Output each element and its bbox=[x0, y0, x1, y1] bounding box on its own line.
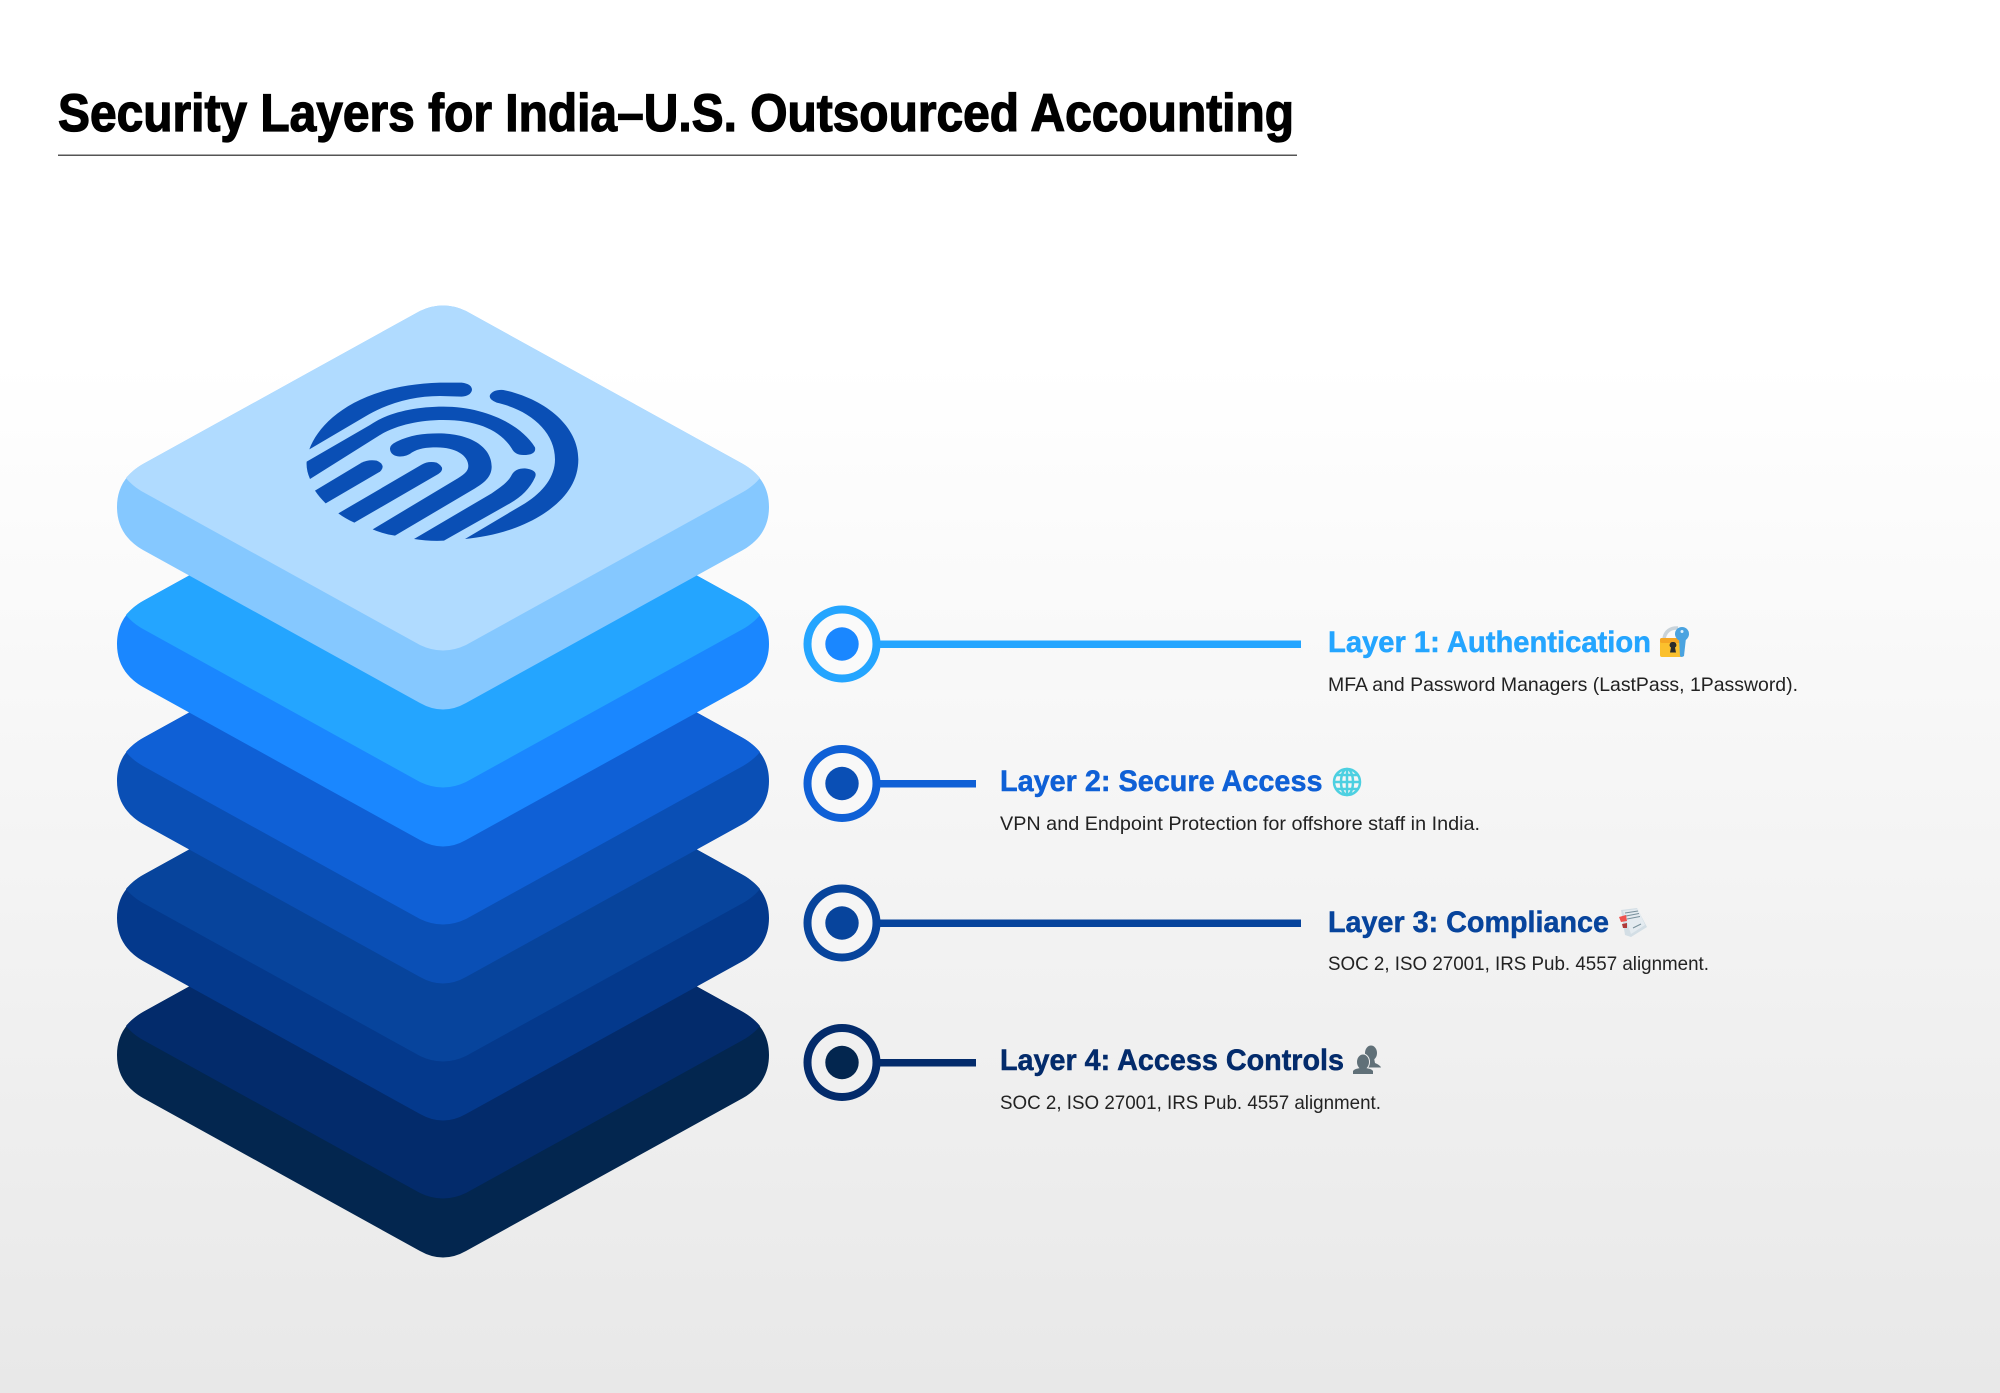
connector line: layer 3 bbox=[878, 920, 1301, 927]
stack layer: access controls bbox=[117, 854, 769, 1258]
callout: layer 4 access controls bbox=[808, 1028, 1381, 1114]
title: Security Layers for India–U.S. Outsourced Accounting bbox=[58, 84, 1294, 143]
marker: layer 1 bbox=[808, 610, 876, 678]
connector line: layer 1 bbox=[878, 640, 1301, 648]
description: layer 3: SOC 2, ISO 27001, IRS Pub. 4557 alignment. bbox=[1328, 953, 1709, 975]
icon: globe bbox=[1334, 769, 1360, 795]
heading: layer 1: Layer 1: Authentication bbox=[1328, 626, 1651, 659]
stack layer: compliance bbox=[117, 716, 769, 1120]
heading: layer 2: Layer 2: Secure Access bbox=[1000, 765, 1322, 798]
stack layer: authentication bbox=[117, 442, 769, 846]
heading: layer 3: Layer 3: Compliance bbox=[1328, 906, 1609, 939]
marker: layer 3 bbox=[808, 888, 876, 958]
marker: layer 4 bbox=[808, 1028, 876, 1097]
stack layer: secure access bbox=[117, 580, 769, 984]
connector line: layer 2 bbox=[878, 780, 976, 788]
marker: layer 2 bbox=[808, 749, 876, 818]
connector line: layer 4 bbox=[878, 1059, 976, 1066]
description: layer 2: VPN and Endpoint Protection for offshore staff in India. bbox=[1000, 813, 1480, 835]
icon: locked with key bbox=[1660, 627, 1689, 657]
callout: layer 2 secure access bbox=[808, 749, 1480, 835]
heading: layer 4: Layer 4: Access Controls bbox=[1000, 1044, 1344, 1077]
description: layer 1: MFA and Password Managers (LastPass, 1Password). bbox=[1328, 674, 1798, 696]
layered security stack bbox=[117, 306, 769, 1258]
icon: fingerprint bbox=[307, 383, 578, 541]
icon: two people silhouettes bbox=[1353, 1046, 1381, 1074]
callout: layer 3 compliance bbox=[808, 888, 1709, 975]
callout: layer 1 authentication bbox=[808, 610, 1798, 696]
icon: document with ribbon bbox=[1619, 908, 1647, 937]
description: layer 4: SOC 2, ISO 27001, IRS Pub. 4557 alignment. bbox=[1000, 1092, 1381, 1114]
stack layer: top plate bbox=[117, 306, 769, 710]
